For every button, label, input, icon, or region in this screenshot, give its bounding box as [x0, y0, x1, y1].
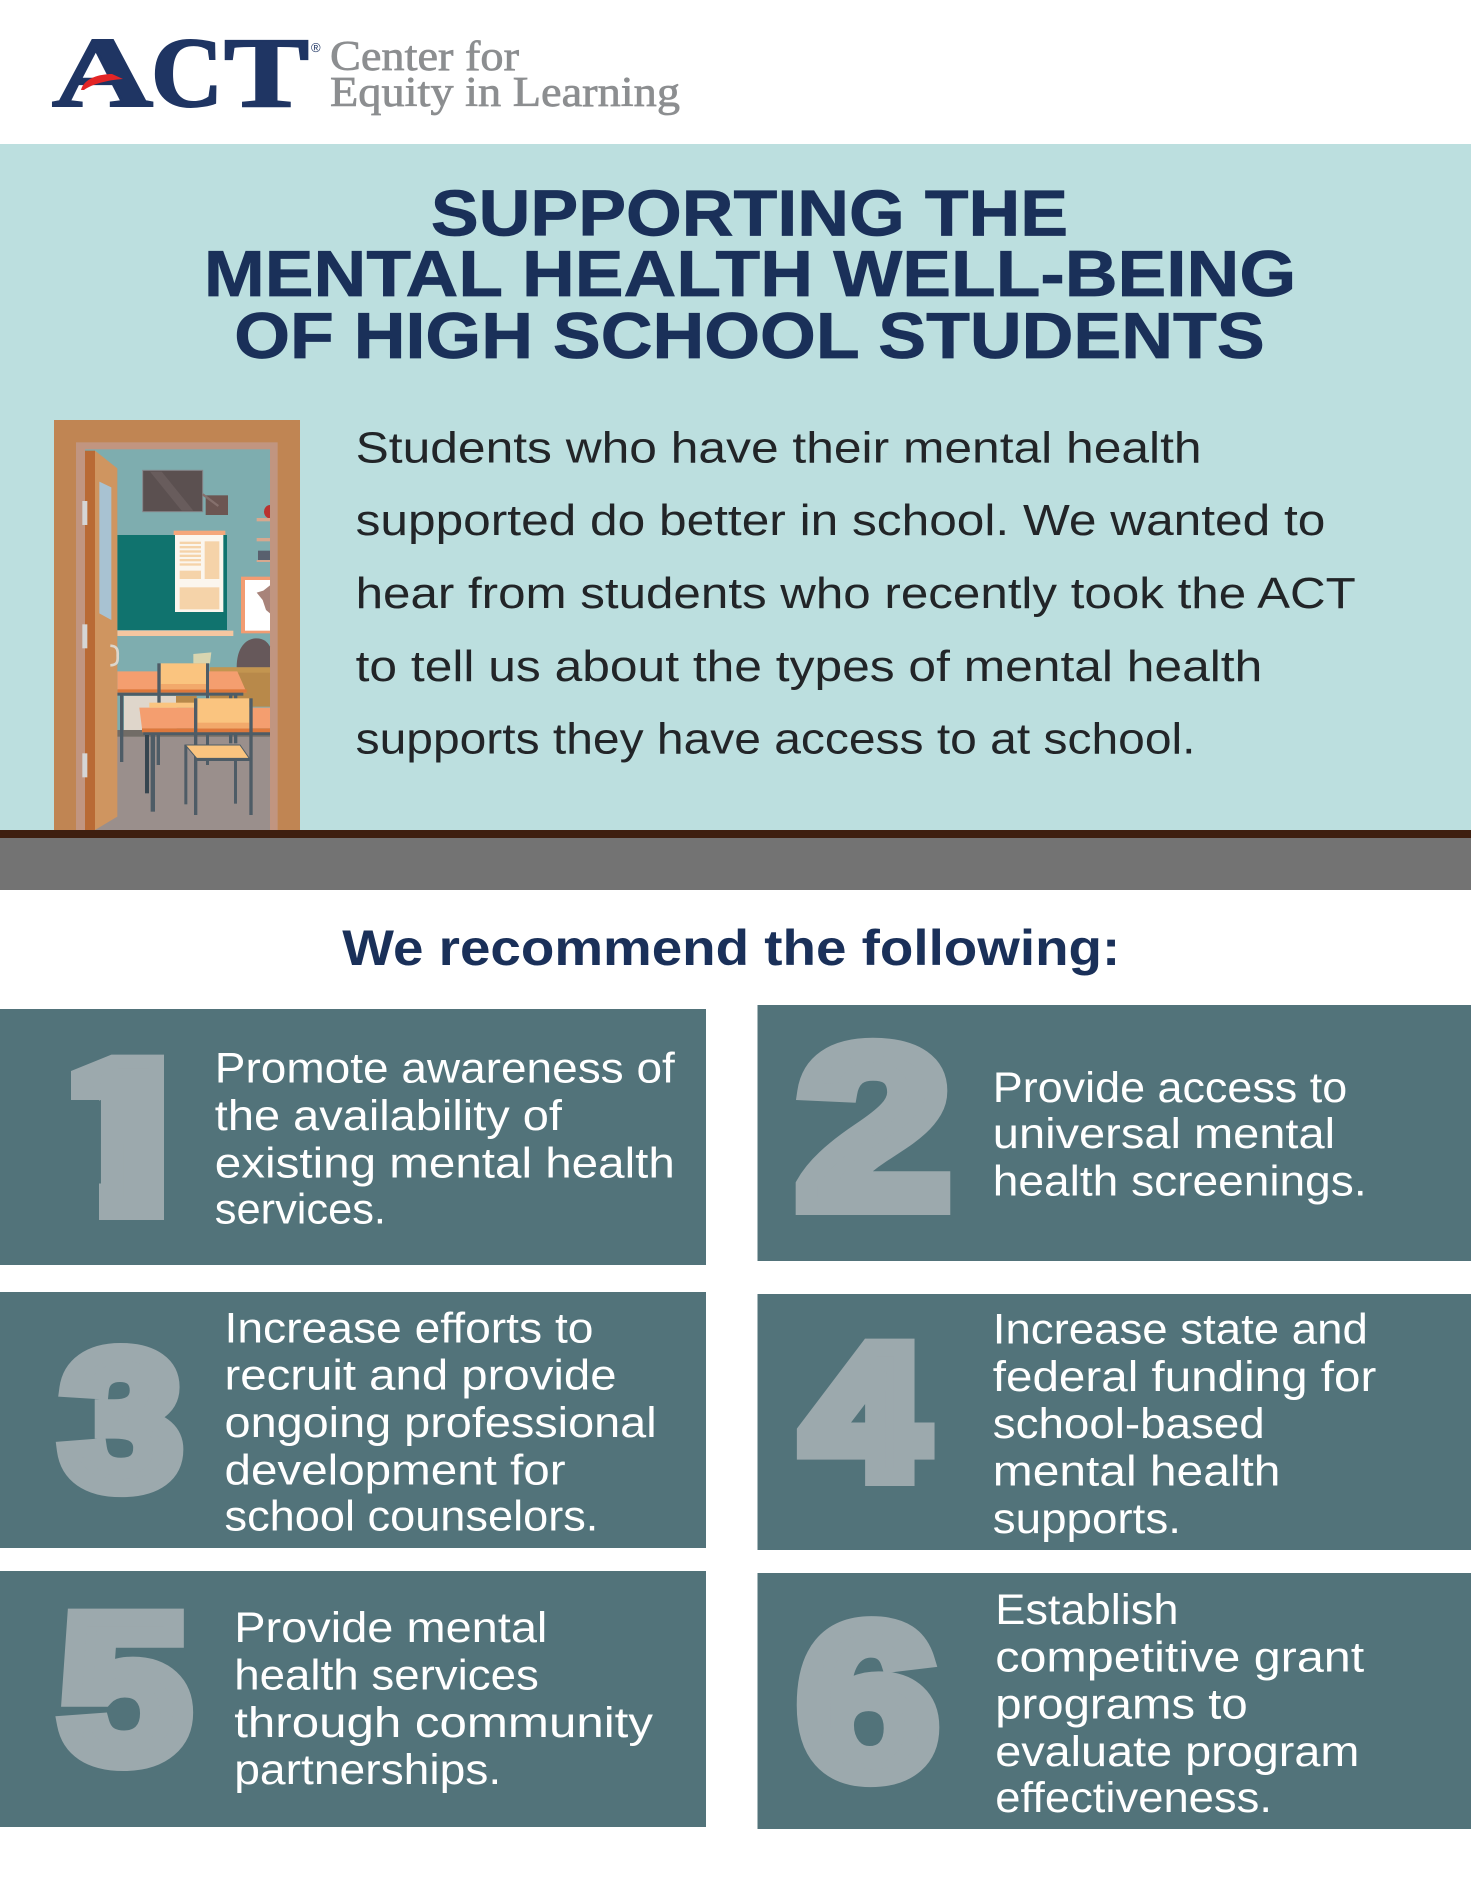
text: recommendation 3: [225, 1304, 657, 1539]
text: recommendation 4: Increase state and: [993, 1306, 1368, 1353]
panel: recommendation 2: [758, 1000, 1471, 1261]
front chair: [184, 698, 253, 815]
text: recommendation 3: school counselors.: [225, 1492, 598, 1539]
logo: ACT Center for Equity in Learning: [52, 17, 680, 128]
subheading: We recommend the following:: [342, 920, 1120, 976]
panel: recommendation 5: [0, 1571, 706, 1827]
text: recommendation 5: [234, 1604, 654, 1793]
intro text block: to tell us about the types of mental health: [356, 642, 1262, 691]
title: [204, 176, 1296, 372]
intro text block: Students who have their mental health: [356, 423, 1202, 472]
ACT wordmark: C: [151, 17, 223, 128]
back cabinet: [124, 696, 197, 730]
floor trim: [0, 830, 1471, 838]
ACT wordmark: A: [52, 17, 153, 128]
poster: [174, 531, 225, 612]
ACT wordmark: [52, 17, 309, 128]
text: recommendation 6: evaluate program: [995, 1728, 1359, 1775]
title: OF HIGH SCHOOL STUDENTS: [234, 299, 1265, 372]
intro text block: hear from students who recently took the ACT: [356, 569, 1356, 618]
icon: wall screen: [143, 470, 228, 515]
title: MENTAL HEALTH WELL-BEING: [204, 237, 1296, 310]
icon: shelves: [257, 505, 270, 562]
intro text block: [356, 423, 1356, 764]
text: recommendation 1: services.: [215, 1185, 386, 1232]
door: [82, 451, 118, 830]
text: recommendation 3: development for: [225, 1446, 566, 1493]
text: recommendation 1: the availability of: [215, 1092, 562, 1139]
text: recommendation 4: mental health: [993, 1448, 1280, 1495]
number 5: 5: [60, 1573, 190, 1804]
registered mark: ®: [311, 40, 321, 55]
number 1: 1: [30, 1014, 226, 1260]
panel: recommendation 6: [758, 1573, 1471, 1829]
teacher chair and desk: [210, 638, 270, 707]
text: recommendation 2: [993, 1064, 1367, 1204]
text: recommendation 3: recruit and provide: [225, 1352, 617, 1399]
text: recommendation 2: health screenings.: [993, 1157, 1367, 1204]
text: recommendation 4: school-based: [993, 1400, 1265, 1447]
text: recommendation 6: [995, 1586, 1364, 1821]
intro text block: supported do better in school. We wanted to: [356, 496, 1325, 545]
ACT wordmark: T: [224, 17, 309, 128]
number 6: 6: [798, 1581, 938, 1822]
panel: recommendation 4: [758, 1294, 1471, 1550]
text: recommendation 3: Increase efforts to: [225, 1304, 593, 1351]
text: recommendation 6: programs to: [995, 1681, 1248, 1728]
illustration: open classroom door: [54, 420, 300, 830]
panel: teal header background: [0, 144, 1471, 830]
panel: recommendation 1: [0, 1009, 706, 1265]
text: recommendation 1: existing mental health: [215, 1139, 675, 1186]
text: recommendation 6: Establish: [995, 1586, 1179, 1633]
number 4: 4: [804, 1308, 925, 1518]
text: recommendation 5: through community: [234, 1699, 654, 1746]
text: recommendation 6: effectiveness.: [995, 1774, 1272, 1821]
logo text line two: Equity in Learning: [330, 70, 680, 116]
text: recommendation 3: ongoing professional: [225, 1399, 657, 1446]
text: recommendation 2: Provide access to: [993, 1064, 1347, 1111]
front desk: [139, 703, 270, 812]
text: recommendation 5: Provide mental: [234, 1604, 547, 1651]
number 2: 2: [797, 1000, 950, 1255]
text: recommendation 1: [215, 1045, 675, 1232]
text: recommendation 4: federal funding for: [993, 1353, 1376, 1400]
floor band: [0, 838, 1471, 890]
panel: recommendation 3: [0, 1292, 706, 1548]
text: recommendation 4: [993, 1306, 1376, 1542]
title: SUPPORTING THE: [431, 176, 1068, 249]
framed map picture: [241, 577, 270, 633]
icon: red swoosh: [81, 74, 123, 90]
number 3: 3: [62, 1313, 181, 1528]
logo text line one: Center for: [330, 34, 519, 80]
text: recommendation 4: supports.: [993, 1495, 1181, 1542]
text: recommendation 5: health services: [234, 1651, 539, 1698]
text: recommendation 2: universal mental: [993, 1110, 1335, 1157]
chalkboard: [117, 535, 233, 636]
text: recommendation 1: Promote awareness of: [215, 1045, 675, 1092]
text: recommendation 6: competitive grant: [995, 1633, 1364, 1680]
back desk: [117, 652, 247, 765]
intro text block: supports they have access to at school.: [356, 715, 1195, 764]
text: recommendation 5: partnerships.: [234, 1746, 501, 1793]
